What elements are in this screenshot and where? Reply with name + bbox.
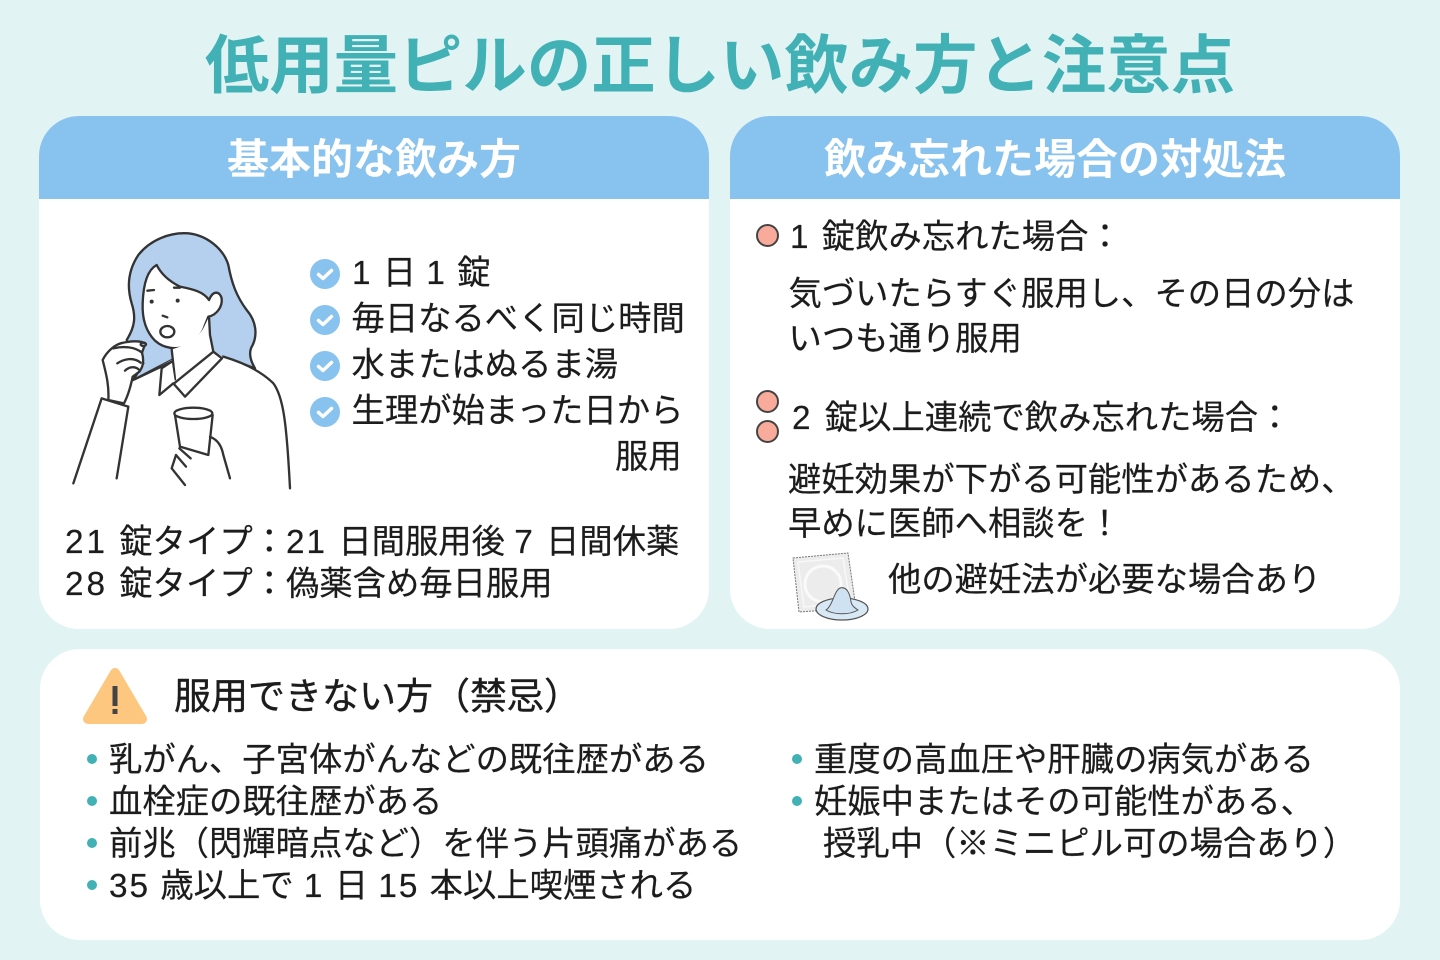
left list	[87, 742, 742, 905]
left list: 前兆（閃輝暗点など）を伴う片頭痛がある	[109, 826, 742, 863]
right list	[792, 742, 1356, 863]
heading: missed dose	[730, 116, 1400, 199]
right list: 授乳中（※ミニピル可の場合あり）	[823, 826, 1356, 863]
check text 1: 1 日 1 錠	[352, 255, 491, 292]
left list: 乳がん、子宮体がんなどの既往歴がある	[109, 742, 709, 779]
checklist	[310, 255, 685, 476]
check text 2: 毎日なるべく同じ時間	[352, 301, 685, 338]
check text 3: 水またはぬるま湯	[352, 347, 618, 384]
right list: 重度の高血圧や肝臓の病気がある	[814, 742, 1314, 779]
one missed text: いつも通り服用	[788, 320, 1022, 358]
icon: check 2	[310, 305, 340, 335]
one missed text	[788, 276, 1354, 358]
21 tablet type: 21 錠タイプ：21 日間服用後 7 日間休薬	[65, 524, 679, 561]
heading: basic usage	[39, 116, 709, 199]
icon: one pill	[756, 224, 779, 247]
icon: check 4	[310, 397, 340, 427]
one missed heading: 1 錠飲み忘れた場合：	[790, 219, 1122, 256]
icon: check 1	[310, 259, 340, 289]
icon: warning	[83, 668, 147, 724]
icon: two pills	[756, 390, 779, 443]
panel: basic usage	[39, 116, 709, 629]
right list: 妊娠中またはその可能性がある、	[814, 784, 1314, 821]
contraception note: 他の避妊法が必要な場合あり	[888, 562, 1321, 599]
icon: check 3	[310, 351, 340, 381]
28 tablet type: 28 錠タイプ：偽薬含め毎日服用	[65, 566, 553, 603]
panel: missed dose	[730, 116, 1400, 629]
panel: contraindications	[40, 649, 1400, 940]
two missed heading: 2 錠以上連続で飲み忘れた場合：	[792, 400, 1291, 437]
icon: condom	[792, 552, 869, 621]
left list: 血栓症の既往歴がある	[109, 784, 442, 821]
one missed text: 気づいたらすぐ服用し、その日の分は	[788, 276, 1354, 312]
check text 4 continuation: 服用	[615, 439, 682, 476]
heading: contraindications: 服用できない方（禁忌）	[174, 676, 581, 717]
left list: 35 歳以上で 1 日 15 本以上喫煙される	[109, 868, 696, 905]
check text 4: 生理が始まった日から	[352, 393, 683, 430]
two missed text: 早めに医師へ相談を！	[788, 506, 1121, 543]
title: 低用量ピルの正しい飲み方と注意点	[205, 30, 1235, 102]
two missed text	[788, 462, 1355, 543]
two missed text: 避妊効果が下がる可能性があるため、	[788, 462, 1355, 499]
heading: missed dose: 飲み忘れた場合の対処法	[824, 136, 1286, 183]
illustration: woman taking a pill	[72, 232, 292, 490]
heading: basic usage: 基本的な飲み方	[227, 136, 521, 183]
pill type text	[65, 524, 679, 603]
